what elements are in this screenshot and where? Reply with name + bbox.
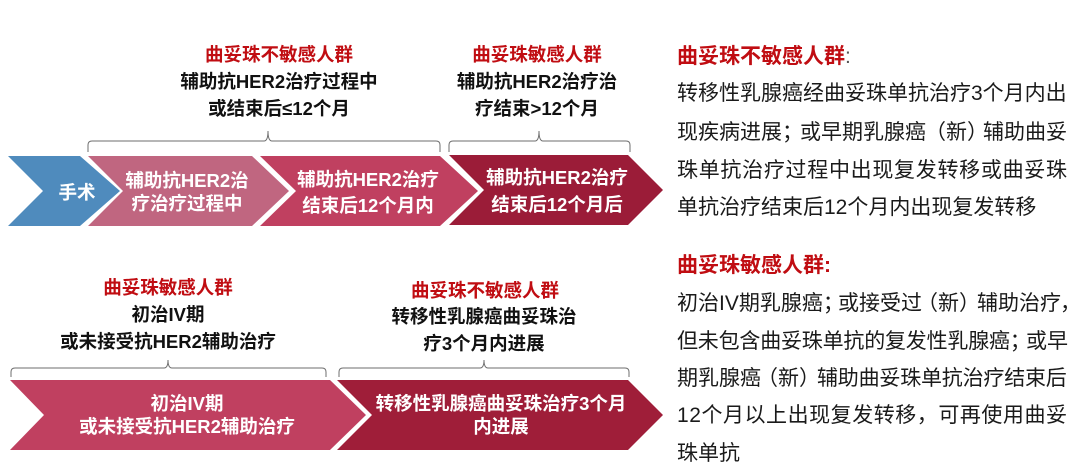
text block: sensitive definition: 或接受过 <box>838 292 922 315</box>
chevron: within 12 months after therapy: 结束后12个月内 <box>302 195 434 216</box>
text block: insensitive definition: 珠单抗治疗过程中出现复发转移或曲妥珠 <box>677 159 1067 182</box>
chevron: during adjuvant therapy: 辅助抗HER2治 <box>125 170 249 191</box>
text block: sensitive definition: 珠单抗 <box>677 442 740 465</box>
text block: insensitive definition: 单抗治疗结束后12个月内出现复发转移 <box>677 196 1036 219</box>
text block: sensitive definition: 曲妥珠敏感人群: <box>677 253 831 277</box>
heading block: sensitive group, bottom: 初治IV期 <box>132 304 204 325</box>
chevron: during adjuvant therapy <box>88 156 289 226</box>
chevron: after 12 months: 辅助抗HER2治疗 <box>486 167 628 188</box>
text block: sensitive definition: 初治IV期乳腺癌； <box>677 292 844 315</box>
text block: sensitive definition: 但未包含曲妥珠单抗的复发性乳腺癌； <box>677 330 1031 353</box>
chevron: surgery: 手术 <box>58 182 96 203</box>
text block: insensitive definition: 或早期乳腺癌 <box>800 121 926 144</box>
chevron: within 12 months after therapy <box>260 156 478 226</box>
panel: bottom timeline <box>10 277 663 450</box>
chevron: stage IV or no adjuvant: 或未接受抗HER2辅助治疗 <box>79 416 295 437</box>
chevron: within 12 months after therapy: 辅助抗HER2治疗 <box>297 169 439 190</box>
heading block: insensitive group, top: 或结束后≤12个月 <box>208 98 350 119</box>
text block: insensitive definition: 转移性乳腺癌经曲妥珠单抗治疗3个月内出 <box>677 82 1067 105</box>
brace: sensitive span <box>11 360 326 377</box>
text block: sensitive definition: 辅助治疗 <box>977 292 1061 315</box>
text block: insensitive definition: （新） <box>925 121 988 144</box>
text block: insensitive definition: 曲妥珠不敏感人群: <box>677 44 851 68</box>
heading block: insensitive group, bottom: 曲妥珠不敏感人群 <box>411 280 559 301</box>
chevron: after 12 months: 结束后12个月后 <box>491 194 623 215</box>
text block: insensitive definition <box>677 44 1067 219</box>
heading block: sensitive group, top: 曲妥珠敏感人群 <box>472 44 602 65</box>
text block: sensitive definition <box>677 253 1080 465</box>
text block: insensitive definition: 辅助曲妥 <box>983 121 1067 144</box>
text block: sensitive definition: （新） <box>917 292 980 315</box>
heading block: insensitive group, bottom <box>391 280 577 354</box>
heading block: sensitive group, bottom: 曲妥珠敏感人群 <box>103 277 233 298</box>
heading block: insensitive group, bottom: 疗3个月内进展 <box>423 333 545 354</box>
text block: sensitive definition: 期乳腺癌 <box>677 367 761 390</box>
heading block: insensitive group, top: 辅助抗HER2治疗过程中 <box>180 71 378 92</box>
chevron: progression within 3 months: 转移性乳腺癌曲妥珠治疗3个月 <box>376 393 626 414</box>
chevron: progression within 3 months <box>337 380 663 450</box>
chevron: progression within 3 months: 内进展 <box>473 416 529 437</box>
chevron: during adjuvant therapy: 疗治疗过程中 <box>131 193 243 214</box>
text block: sensitive definition: 12个月以上出现复发转移，可再使用曲妥 <box>677 404 1067 427</box>
chevron: stage IV or no adjuvant <box>10 380 366 450</box>
heading block: sensitive group, bottom <box>60 277 276 352</box>
heading block: insensitive group, bottom: 转移性乳腺癌曲妥珠治 <box>391 306 577 327</box>
heading block: sensitive group, top: 辅助抗HER2治疗治 <box>457 71 617 92</box>
heading block: insensitive group, top <box>180 44 378 119</box>
heading block: insensitive group, top: 曲妥珠不敏感人群 <box>205 44 353 65</box>
heading block: sensitive group, top: 疗结束>12个月 <box>475 98 599 119</box>
brace: insensitive span <box>339 360 629 377</box>
text block: sensitive definition: （新） <box>757 367 820 390</box>
text block: insensitive definition: 现疾病进展； <box>677 121 803 144</box>
chevron: after 12 months <box>449 155 663 225</box>
chevron: stage IV or no adjuvant: 初治IV期 <box>151 393 223 414</box>
heading block: sensitive group, top <box>457 44 617 119</box>
text block: sensitive definition: 或早 <box>1026 330 1068 353</box>
heading block: sensitive group, bottom: 或未接受抗HER2辅助治疗 <box>60 331 276 352</box>
brace: sensitive span <box>449 131 630 152</box>
text block: sensitive definition: 辅助曲妥珠单抗治疗结束后 <box>817 367 1067 390</box>
brace: insensitive span <box>88 131 440 152</box>
panel: top timeline <box>8 44 663 226</box>
chevron: surgery <box>8 156 120 226</box>
